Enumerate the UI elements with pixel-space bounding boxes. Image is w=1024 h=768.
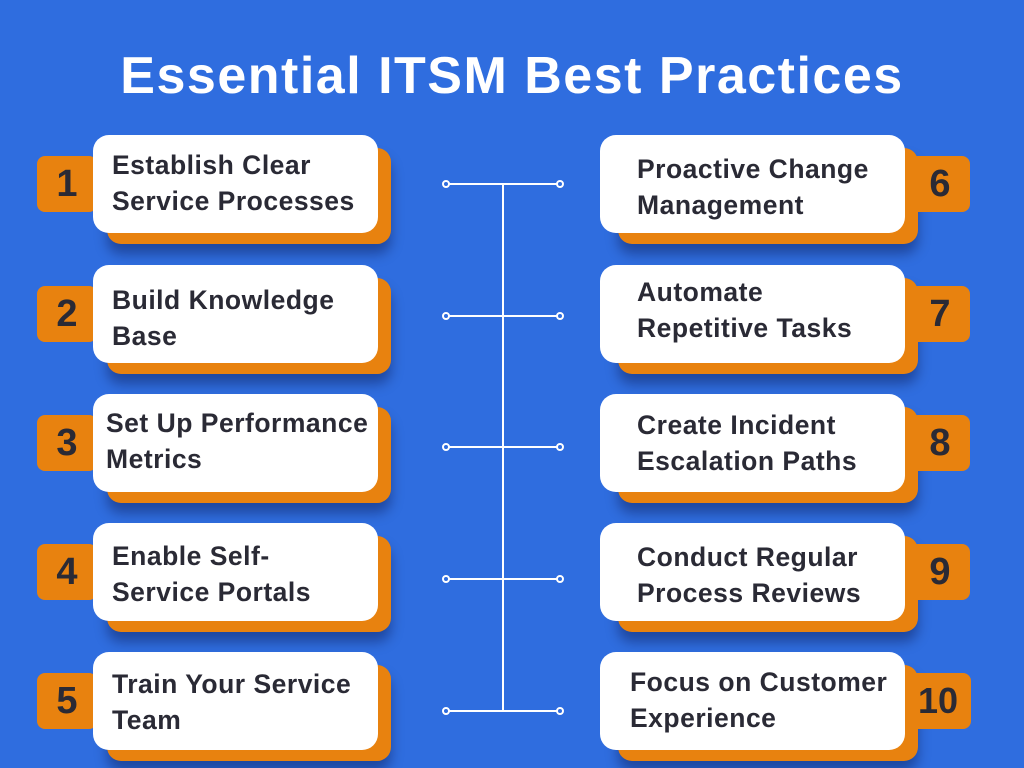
item 9: [600, 523, 970, 649]
item 4: [37, 523, 398, 649]
item 5: Team: [112, 705, 181, 735]
item 8: Escalation Paths: [637, 446, 857, 476]
item 10: [600, 652, 971, 768]
item 5: [37, 652, 398, 768]
item 4: Service Portals: [112, 577, 311, 607]
item 6: 6: [929, 163, 951, 205]
item 10: Experience: [630, 703, 776, 733]
item 2: Base: [112, 321, 177, 351]
item 1: Establish Clear: [112, 150, 311, 180]
title: Essential ITSM Best Practices: [120, 47, 904, 105]
item 6: Proactive Change: [637, 154, 869, 184]
item 9: Process Reviews: [637, 578, 861, 608]
item 1: [37, 135, 398, 261]
item 9: 9: [929, 551, 951, 593]
item 2: Build Knowledge: [112, 285, 334, 315]
item 2: 2: [56, 293, 78, 335]
item 10: Focus on Customer: [630, 667, 887, 697]
item 1: Service Processes: [112, 186, 355, 216]
item 1: 1: [56, 163, 78, 205]
item 8: [600, 394, 970, 520]
item 8: 8: [929, 422, 951, 464]
item 7: Automate: [637, 277, 763, 307]
item 3: [37, 394, 398, 520]
item 3: 3: [56, 422, 78, 464]
item 3: Set Up Performance: [106, 408, 368, 438]
item 6: Management: [637, 190, 804, 220]
item 2: [37, 265, 398, 391]
item 3: Metrics: [106, 444, 202, 474]
item 5: 5: [56, 680, 78, 722]
item 9: Conduct Regular: [637, 542, 858, 572]
item 4: 4: [56, 551, 78, 593]
item 10: 10: [918, 680, 958, 721]
item 7: Repetitive Tasks: [637, 313, 852, 343]
item 7: [600, 265, 970, 391]
item 6: [600, 135, 970, 261]
item 4: Enable Self-: [112, 541, 270, 571]
item 7: 7: [929, 293, 951, 335]
item 5: Train Your Service: [112, 669, 351, 699]
item 8: Create Incident: [637, 410, 836, 440]
